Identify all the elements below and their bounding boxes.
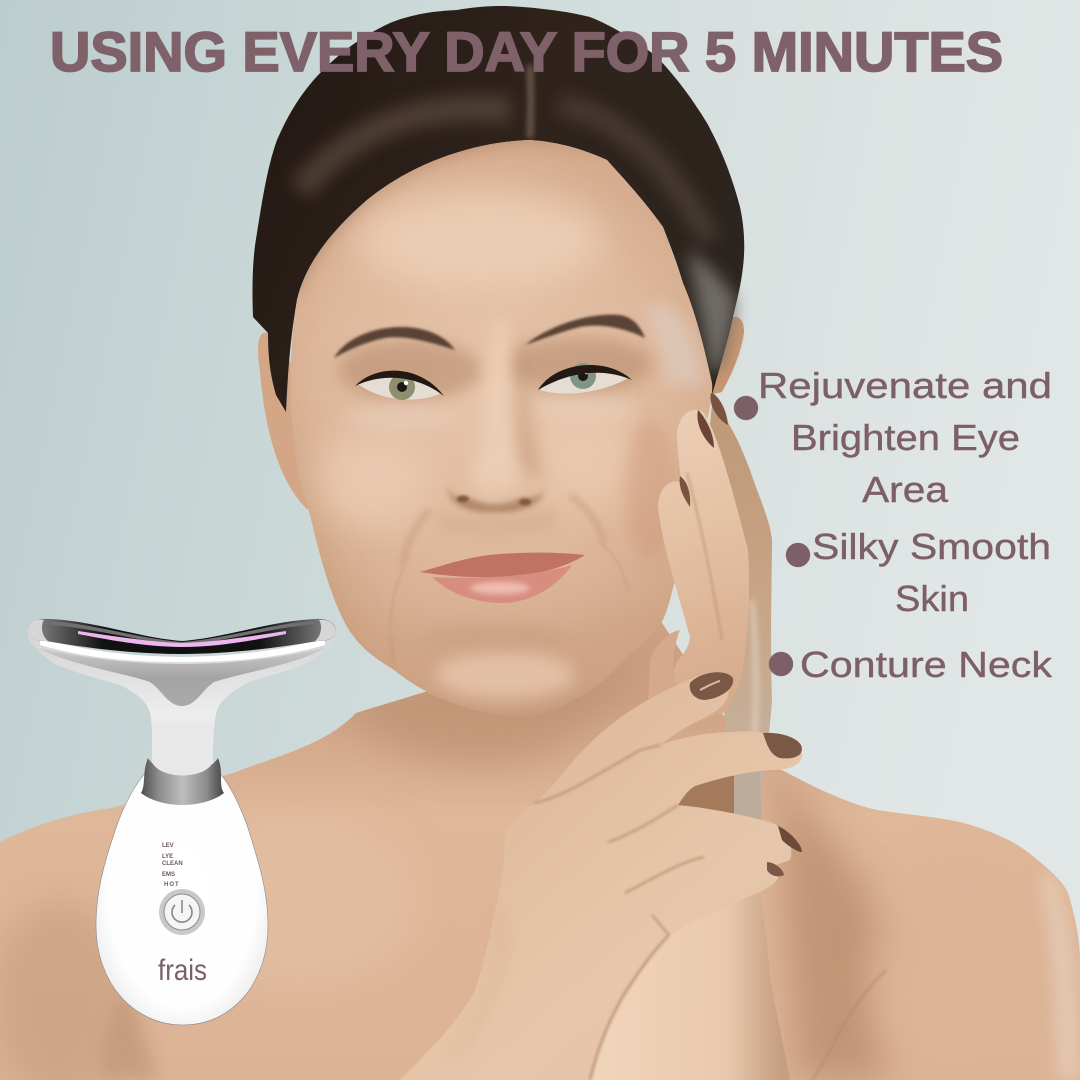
hair highlights and parting (300, 65, 710, 240)
product: frais neck device (27, 619, 336, 1025)
temple highlight (645, 303, 706, 385)
mode labels (162, 843, 183, 888)
chrome end caps (27, 620, 48, 641)
shadow behind clasped fingers (672, 775, 760, 825)
forearm (590, 895, 790, 1080)
benefit: rejuvenate eye area: Brighten Eye (791, 417, 1020, 458)
benefit: silky smooth skin: Silky Smooth (812, 526, 1051, 567)
title: USING EVERY DAY FOR 5 MINUTES (50, 20, 1003, 83)
eye sockets (338, 340, 482, 400)
benefit: rejuvenate eye area: Area (862, 469, 949, 510)
forearm overlap shadow (590, 935, 669, 1080)
head underside and stem (27, 632, 336, 772)
chest and shoulder shading (0, 640, 1080, 1080)
fringed edge continuing behind hand (734, 770, 762, 825)
bullet (734, 396, 758, 420)
vein shading (450, 910, 501, 1060)
mode labels: EMS (162, 872, 175, 878)
eyes (355, 363, 632, 400)
lower clasped hand (400, 672, 802, 1080)
upper hand on cheek (648, 393, 772, 816)
palm behind fingers (648, 630, 680, 710)
benefit: contour neck: Conture Neck (800, 644, 1053, 685)
eyebrows (334, 315, 645, 358)
left eye (358, 375, 440, 400)
fingernails (710, 393, 728, 425)
nose bridge (482, 327, 514, 460)
device stem (152, 722, 213, 776)
smile lines and wrinkles (404, 495, 604, 566)
hair (252, 6, 744, 412)
nose (440, 455, 555, 527)
right eye (540, 370, 628, 394)
pink light strip (78, 631, 286, 647)
brand logo: frais (158, 954, 207, 987)
mode labels: LYE (162, 854, 173, 860)
mode labels: HOT (164, 882, 180, 888)
shoulders and chest (0, 620, 1080, 1080)
facial shading (280, 120, 706, 730)
bullet (769, 652, 793, 676)
benefit: silky smooth skin (786, 526, 1051, 619)
little finger (658, 481, 732, 730)
white highlight line (40, 638, 325, 662)
forehead highlight and hairline shade (355, 190, 605, 290)
grey temple hair (688, 250, 736, 370)
side shading (295, 448, 352, 634)
right arm crease (812, 970, 886, 1080)
mode labels: LEV (162, 843, 174, 849)
lips (420, 553, 585, 603)
face (291, 140, 712, 717)
cheek highlights (317, 432, 427, 528)
fingernails (690, 672, 733, 700)
mode labels: CLEAN (162, 861, 183, 867)
middle finger (677, 410, 749, 700)
jaw and chin (390, 610, 660, 720)
fringed back of hand (708, 405, 772, 816)
ears (258, 333, 320, 510)
grey inner panel (38, 648, 325, 706)
chrome head band (27, 619, 336, 654)
benefit: rejuvenate eye area: Rejuvenate and (758, 365, 1052, 406)
finger joint lines (687, 473, 722, 640)
body (96, 752, 268, 1025)
power button (159, 889, 205, 935)
benefit: silky smooth skin: Skin (895, 578, 969, 619)
benefit: rejuvenate eye area (734, 365, 1052, 510)
finger creases (534, 745, 704, 935)
chrome collar (141, 758, 224, 805)
bullet (786, 543, 810, 567)
